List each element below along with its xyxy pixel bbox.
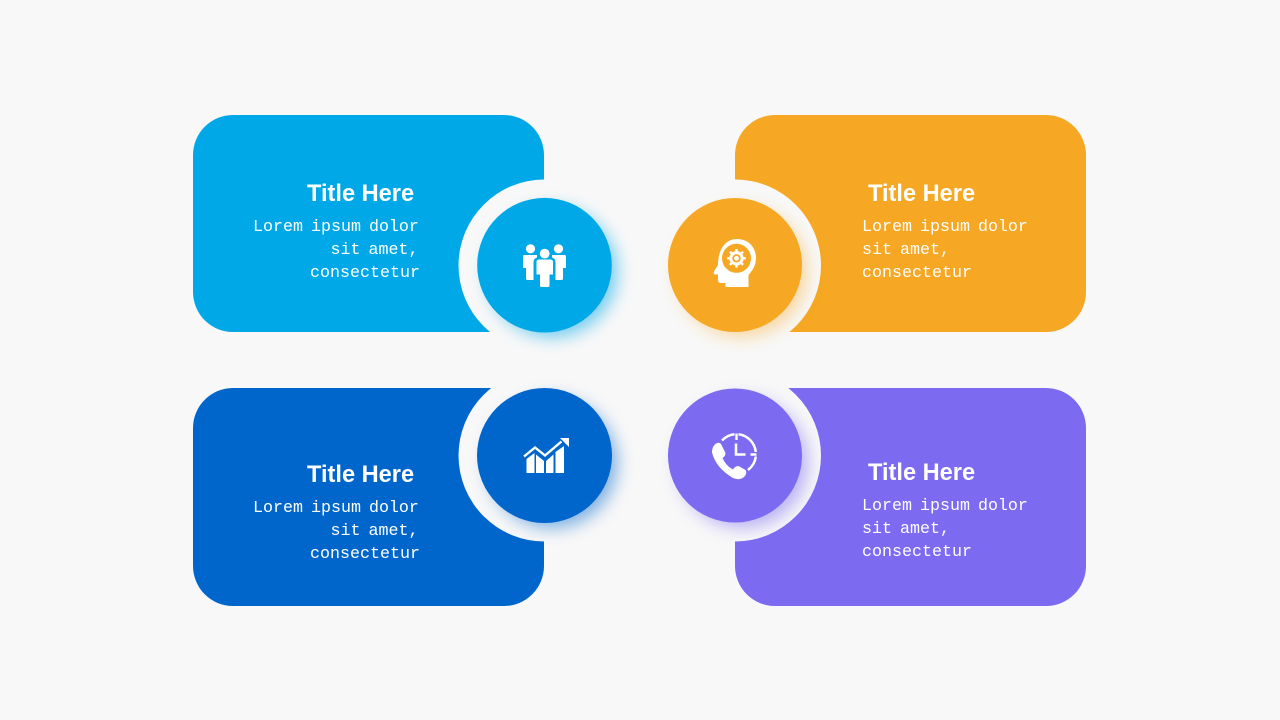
circle: blue: [477, 198, 612, 332]
text block: orange: consectetur: [862, 264, 972, 283]
panel: top right orange: [649, 115, 1086, 352]
text block: orange: sit amet,: [862, 241, 950, 260]
circle: purple: [668, 388, 802, 522]
panel: bottom left dark blue: [193, 370, 630, 606]
heading: purple: Title Here: [868, 460, 975, 486]
text block: purple: sit amet,: [862, 520, 950, 539]
circle shadow: dark blue: [487, 398, 617, 528]
text block: blue: Lorem ipsum dolor: [253, 218, 419, 237]
circle shadow: purple: [678, 398, 808, 528]
icon: growth chart: [524, 438, 569, 473]
circle: dark blue: [477, 388, 612, 523]
text block: purple: consectetur: [862, 543, 972, 562]
ring cutout: dark blue: [458, 370, 630, 542]
text block: dark blue: Lorem ipsum dolor: [253, 499, 419, 518]
card: dark blue: [193, 388, 544, 606]
text block: dark blue: sit amet,: [330, 522, 418, 541]
circle shadow: blue: [487, 207, 617, 337]
ring cutout: orange: [649, 180, 821, 352]
circle: orange: [668, 198, 802, 332]
circle shadow: orange: [677, 207, 807, 337]
ring cutout: purple: [649, 370, 821, 542]
panel: bottom right purple: [649, 370, 1086, 606]
card: blue: [193, 115, 544, 332]
icon: people: [523, 244, 566, 287]
text block: blue: consectetur: [310, 264, 420, 283]
panel: top left blue: [193, 115, 630, 352]
text block: dark blue: consectetur: [310, 545, 420, 564]
heading: orange: Title Here: [868, 181, 975, 207]
text block: orange: Lorem ipsum dolor: [862, 218, 1028, 237]
icon: phone and clock: [712, 434, 756, 479]
text block: purple: Lorem ipsum dolor: [862, 497, 1028, 516]
card: orange: [735, 115, 1086, 332]
icon: head with gear: [714, 239, 756, 287]
heading: blue: Title Here: [307, 181, 414, 207]
text block: blue: sit amet,: [330, 241, 418, 260]
ring cutout: blue: [458, 180, 630, 352]
heading: dark blue: Title Here: [307, 462, 414, 488]
card: purple: [735, 388, 1086, 606]
